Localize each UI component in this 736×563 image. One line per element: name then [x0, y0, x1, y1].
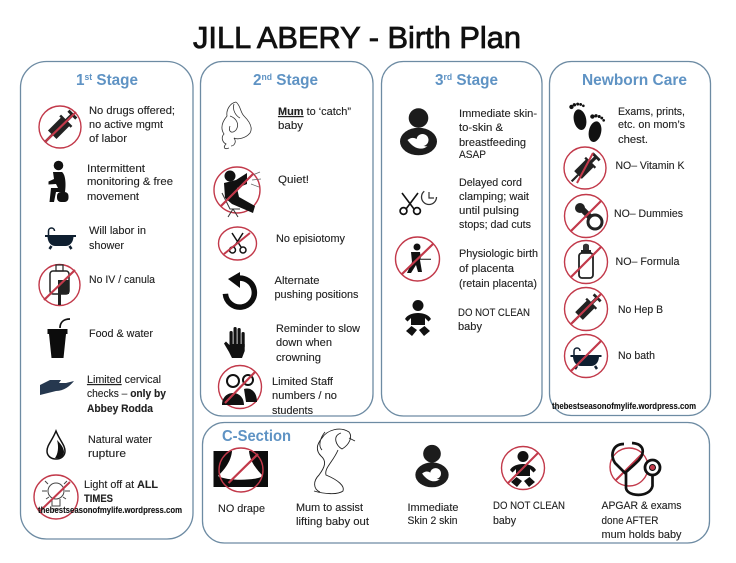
text: mum catch — [278, 106, 351, 132]
title: JILL ABERY - Birth Plan — [193, 20, 521, 55]
text: lights off: TIMES — [84, 493, 113, 505]
item: exams — [569, 101, 685, 146]
text: delayed clamping: Delayed cord — [459, 177, 522, 189]
text: no drugs: of labor — [89, 133, 127, 145]
item: apgar — [602, 443, 682, 541]
panel frame — [20, 62, 193, 539]
text: delayed clamping: stops; dad cuts — [459, 219, 531, 231]
text: slow down: crowning — [276, 352, 321, 364]
icon: no pacifier — [564, 194, 608, 238]
heading: c-section: C-Section — [222, 428, 291, 445]
text: monitoring: monitoring & free — [87, 176, 173, 188]
heading: 1st stage: Stage — [92, 72, 138, 89]
heading: 3rd stage: Stage — [452, 72, 498, 89]
item: no dummies — [564, 194, 683, 238]
text: mum catch: Mum to ‘catch” — [278, 106, 351, 118]
item: no vitamin K — [564, 147, 685, 189]
icon: no IV bag — [39, 264, 80, 306]
item: mum assist — [296, 429, 369, 528]
panel frame — [200, 62, 373, 416]
item: skin to skin — [400, 108, 537, 161]
text: mum assist: lifting baby out — [296, 516, 369, 528]
text: no hep B: No Hep B — [618, 304, 663, 316]
text: limited staff: numbers / no — [272, 390, 337, 402]
item: do not clean — [405, 300, 530, 336]
icon: no drape — [214, 448, 268, 492]
watermark: thebestseasonofmylife.wordpress.com — [552, 401, 696, 411]
text: physiologic birth: of placenta — [459, 263, 515, 275]
item: no bath — [564, 334, 655, 378]
text: no dummies: NO– Dummies — [614, 208, 683, 220]
text: skin to skin: Immediate skin- — [459, 108, 537, 120]
text: no drape: NO drape — [218, 503, 265, 515]
text: delayed clamping: until pulsing — [459, 205, 519, 217]
panel: c-section — [202, 422, 710, 543]
text: skin to skin: breastfeeding — [459, 137, 526, 149]
text: no drugs: No drugs offered; — [89, 105, 175, 117]
icon: no syringe — [564, 288, 608, 330]
text: skin 2 skin — [408, 502, 458, 527]
panel: newborn care — [550, 62, 710, 416]
text: monitoring: movement — [87, 191, 139, 203]
text: shower — [89, 225, 146, 252]
text: no IV: No IV / canula — [89, 274, 156, 286]
text: monitoring — [87, 163, 173, 203]
text: exams: Exams, prints, — [618, 106, 685, 118]
text: exams — [618, 106, 685, 146]
text: do not clean: baby — [458, 321, 482, 333]
heading: 3rd stage: rd — [444, 72, 452, 82]
icon: no bottle — [564, 240, 608, 284]
item: no IV — [39, 264, 156, 306]
text: physiologic birth: Physiologic birth — [459, 248, 538, 260]
text: skin to skin — [459, 108, 537, 161]
item: delayed clamping — [400, 177, 531, 231]
text: do not clean: DO NOT CLEAN — [458, 307, 530, 319]
text: do not clean — [458, 307, 530, 333]
text: apgar: done AFTER — [602, 515, 659, 527]
icon: baby feet — [569, 101, 606, 143]
icon: no syringe — [39, 106, 81, 148]
icon: cup with straw — [48, 319, 70, 358]
text: no bath: No bath — [618, 350, 655, 362]
text: do not clean — [493, 500, 565, 527]
icon: baby — [405, 300, 431, 336]
icon: scissors and clock — [400, 190, 436, 214]
icon: woman line drawing — [222, 102, 251, 149]
text: apgar: APGAR & exams — [602, 500, 682, 512]
item: water rupture — [47, 431, 152, 460]
item: quiet — [214, 167, 309, 217]
item: monitoring — [48, 161, 173, 203]
text: skin to skin: ASAP — [459, 149, 486, 161]
text: water rupture: rupture — [88, 448, 126, 460]
icon: hand — [40, 380, 74, 395]
item: skin 2 skin — [408, 445, 458, 527]
item: lights off — [34, 475, 158, 519]
icon: no staff — [218, 366, 262, 408]
text: cervical checks: Abbey Rodda — [87, 403, 154, 415]
text: water rupture: Natural water — [88, 434, 152, 446]
panel frame — [550, 62, 710, 416]
item: food and water — [48, 319, 153, 358]
text: physiologic birth: (retain placenta) — [459, 278, 537, 290]
text: apgar — [602, 500, 682, 541]
heading: 2nd stage: nd — [262, 72, 272, 82]
panel frame — [202, 422, 710, 543]
text: mum assist — [296, 502, 369, 528]
text: cervical checks: checks – only by — [87, 388, 167, 400]
text: limited staff — [272, 376, 337, 417]
text: limited staff: Limited Staff — [272, 376, 334, 388]
icon: no megaphone — [214, 167, 261, 217]
text: exams: etc. on mom’s — [618, 119, 685, 131]
icon: water drop — [47, 431, 65, 459]
icon: hand stop — [224, 327, 245, 358]
text: skin 2 skin: Immediate — [408, 502, 458, 514]
item: cervical checks — [40, 374, 167, 415]
text: no vitamin K: NO– Vitamin K — [616, 160, 685, 172]
text: physiologic birth — [459, 248, 538, 290]
text: cervical checks — [87, 374, 167, 415]
icon: rotate arrow — [223, 272, 258, 311]
text: food and water: Food & water — [89, 328, 153, 340]
text: do not clean: baby — [493, 515, 516, 527]
panel frame — [382, 62, 542, 416]
panel: 2nd stage — [200, 62, 373, 417]
item: shower — [45, 225, 146, 252]
text: lights off: Light off at ALL — [84, 479, 158, 491]
text: skin to skin: to-skin & — [459, 122, 504, 134]
text: cervical checks: Limited cervical — [87, 374, 161, 386]
icon: no syringe — [564, 147, 606, 189]
text: mum assist: Mum to assist — [296, 502, 363, 514]
icon: no pulling cord — [396, 237, 440, 281]
text: water rupture — [88, 434, 152, 460]
icon: sitting person — [48, 161, 68, 202]
text: pushing positions: Alternate — [274, 275, 320, 287]
text: delayed clamping — [459, 177, 531, 231]
text: limited staff: students — [272, 405, 313, 417]
panel: 1st stage — [20, 62, 193, 539]
text: mum catch: baby — [278, 120, 304, 132]
icon: bathtub — [45, 228, 76, 249]
watermark: thebestseasonofmylife.wordpress.com — [38, 505, 182, 515]
panel: 3rd stage — [382, 62, 542, 416]
heading: 2nd stage: 2 — [253, 72, 262, 89]
icon: no baby cleaning — [502, 446, 544, 490]
item: limited staff — [218, 366, 337, 417]
text: no episiotomy: No episiotomy — [276, 233, 345, 245]
text: apgar: mum holds baby — [602, 529, 682, 541]
icon: no scissors — [218, 227, 256, 260]
heading: 2nd stage: Stage — [272, 72, 318, 89]
text: delayed clamping: clamping; wait — [459, 191, 529, 203]
icon: breastfeeding — [415, 445, 449, 487]
item: no drape — [214, 448, 268, 515]
icon: woman line drawing — [314, 429, 355, 494]
item: no episiotomy — [218, 227, 345, 260]
icon: no bathtub — [564, 334, 608, 378]
icon: no light bulb — [34, 475, 78, 519]
heading: 1st stage: st — [85, 72, 92, 82]
item: no hep B — [564, 288, 663, 330]
text: lights off — [84, 479, 158, 505]
text: quiet: Quiet! — [278, 174, 309, 186]
text: no drugs: no active mgmt — [89, 119, 163, 131]
item: do not clean — [493, 446, 565, 527]
item: mum catch — [222, 102, 351, 149]
item: no drugs — [39, 105, 175, 148]
text: skin 2 skin: Skin 2 skin — [408, 515, 458, 527]
heading: newborn care: Newborn Care — [582, 72, 687, 89]
text: shower: Will labor in — [89, 225, 146, 237]
heading: 1st stage: 1 — [76, 72, 85, 89]
item: pushing positions — [223, 272, 359, 311]
text: pushing positions: pushing positions — [274, 289, 359, 301]
item: physiologic birth — [396, 237, 538, 290]
text: no formula: NO– Formula — [616, 256, 680, 268]
text: slow down — [276, 323, 360, 364]
text: slow down: Reminder to slow — [276, 323, 360, 335]
item: slow down — [224, 323, 360, 364]
text: slow down: down when — [276, 337, 332, 349]
text: no drugs — [89, 105, 175, 145]
text: exams: chest. — [618, 134, 648, 146]
icon: breastfeeding — [400, 108, 437, 155]
item: no formula — [564, 240, 680, 284]
text: monitoring: Intermittent — [87, 163, 145, 175]
text: do not clean: DO NOT CLEAN — [493, 500, 565, 512]
icon: no stethoscope — [610, 443, 660, 495]
text: shower: shower — [89, 240, 124, 252]
text: pushing positions — [274, 275, 359, 301]
heading: 3rd stage: 3 — [435, 72, 444, 89]
